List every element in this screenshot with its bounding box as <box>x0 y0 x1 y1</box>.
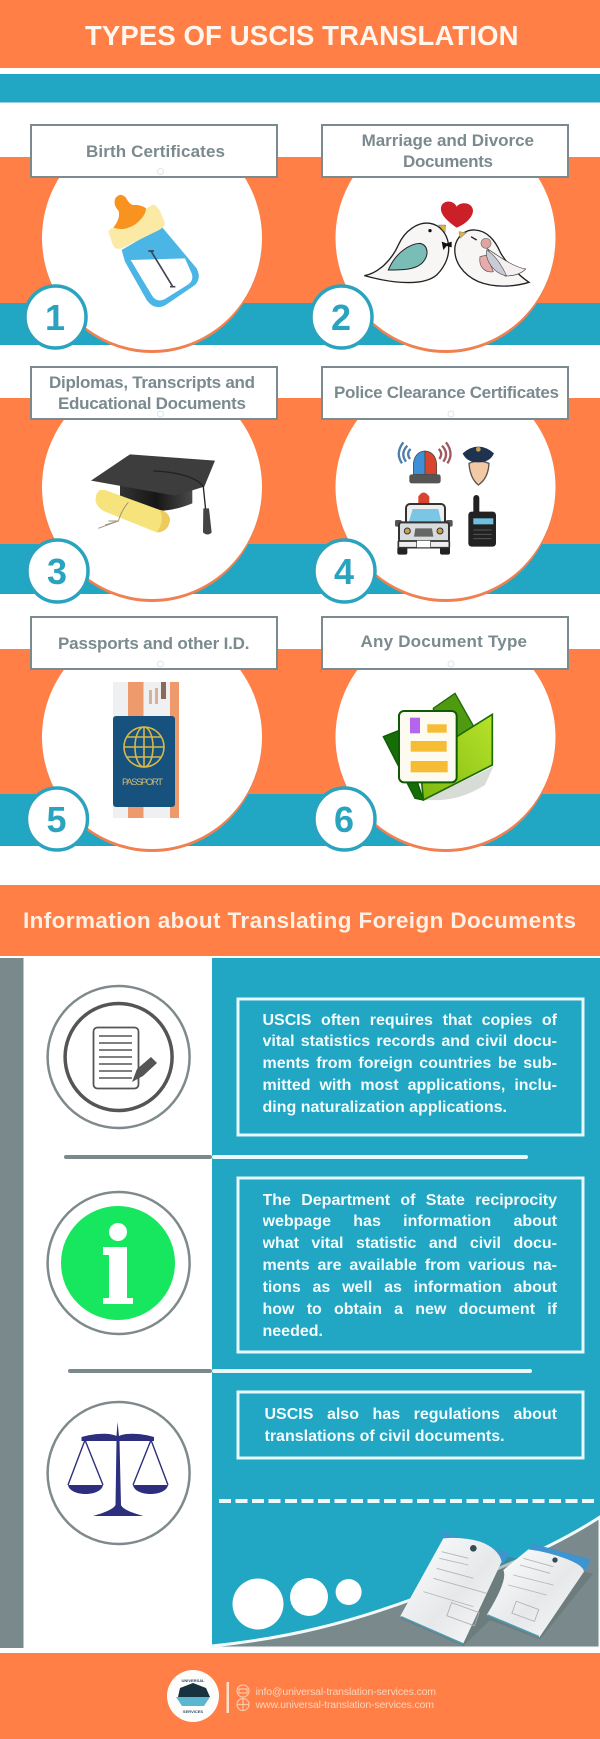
text box 2: The Department of State reciprocity <box>262 1192 557 1208</box>
number 1: 1 <box>45 297 65 338</box>
number 4 <box>314 540 375 602</box>
text box 2: how to obtain a new document if <box>262 1301 557 1318</box>
text box 1: mitted with most applications, inclu- <box>262 1077 557 1094</box>
footer: info@universal-translation-services.com <box>256 1686 436 1698</box>
text box 3: USCIS also has regulations about <box>264 1406 557 1423</box>
panel: marriage and divorce documents: Marriage and Divorce <box>362 131 534 150</box>
separator <box>226 1682 229 1713</box>
icon: graduation cap and diploma <box>91 454 215 534</box>
panel: teal information column <box>205 958 600 1653</box>
panel: passports and other ID <box>26 617 277 852</box>
icon: police set <box>395 442 496 555</box>
footer: www.universal-translation-services.com <box>255 1699 434 1711</box>
text box 2: tions as well as information about <box>262 1279 557 1296</box>
icon: baby bottle <box>108 195 199 307</box>
section heading banner <box>0 885 600 956</box>
text box 2: webpage has information about <box>262 1213 557 1230</box>
icon: document and pen <box>48 986 190 1128</box>
icon: scales of justice <box>48 1402 190 1544</box>
divider 1 <box>64 1155 528 1159</box>
panel: birth certificates: Birth Certificates <box>86 142 225 161</box>
panel: police clearance certificates <box>314 367 568 602</box>
icon: love birds <box>364 201 529 286</box>
panel: row 3 background <box>0 649 600 846</box>
text box 2 <box>238 1178 583 1352</box>
logo <box>167 1670 219 1722</box>
number 1 <box>25 286 86 348</box>
divider 2 <box>68 1369 532 1373</box>
panel: birth certificates <box>25 125 277 353</box>
icon: passport and tickets: PASSPORT <box>122 777 163 788</box>
number 3 <box>27 540 88 602</box>
number 6 <box>314 788 375 850</box>
footer <box>0 1653 600 1739</box>
text box 2: ments are available from various na- <box>262 1257 557 1274</box>
number 6: 6 <box>334 799 354 840</box>
text box 1: USCIS often requires that copies of <box>262 1012 557 1028</box>
icon: passport and tickets <box>113 682 179 818</box>
number 2 <box>311 286 372 348</box>
teal stripe <box>0 74 600 102</box>
panel: any document type: Any Document Type <box>360 632 527 651</box>
title banner <box>0 0 600 68</box>
section heading banner: Information about Translating Foreign Documents <box>23 908 576 933</box>
number 2: 2 <box>331 297 351 338</box>
number 3: 3 <box>47 551 67 592</box>
panel: marriage and divorce documents <box>311 125 568 353</box>
contact details <box>237 1685 249 1710</box>
text box 1 <box>238 999 583 1135</box>
number 5 <box>26 788 88 850</box>
decorative dots <box>232 1578 362 1630</box>
number 5: 5 <box>46 799 67 840</box>
icon: information <box>48 1192 190 1334</box>
panel: any document type <box>314 617 568 852</box>
panel: grey side strip <box>0 958 24 1648</box>
text box 1: ding naturalization applications. <box>262 1099 507 1116</box>
panel: police clearance certificates: Police Clearance Certificates <box>334 383 559 402</box>
panel: diplomas and transcripts: Educational Documents <box>58 394 246 413</box>
logo: UNIVERSAL <box>181 1678 205 1683</box>
number 4: 4 <box>334 551 354 592</box>
dashed line <box>219 1499 595 1503</box>
logo: SERVICES <box>183 1709 203 1714</box>
panel: marriage and divorce documents: Documents <box>403 152 493 171</box>
panel: row 1 background <box>0 157 600 345</box>
title banner: TYPES OF USCIS TRANSLATION <box>85 20 518 51</box>
panel: diplomas and transcripts: Diplomas, Transcripts and <box>49 373 255 392</box>
panel: passports and other ID: Passports and other I.D. <box>58 634 250 653</box>
image: letterhead sheets <box>400 1532 593 1646</box>
text box 1: vital statistics records and civil docu- <box>262 1033 557 1050</box>
grey curved corner <box>212 1517 600 1648</box>
text box 1: ments from foreign countries be sub- <box>262 1055 557 1072</box>
panel: row 2 background <box>0 398 600 594</box>
text box 2: needed. <box>262 1323 323 1340</box>
icon: folder with document <box>383 693 493 800</box>
text box 2: what vital statistic and civil docu- <box>262 1235 557 1252</box>
panel: diplomas and transcripts <box>27 367 277 602</box>
text box 3: translations of civil documents. <box>264 1428 505 1445</box>
text box 3 <box>238 1392 583 1458</box>
